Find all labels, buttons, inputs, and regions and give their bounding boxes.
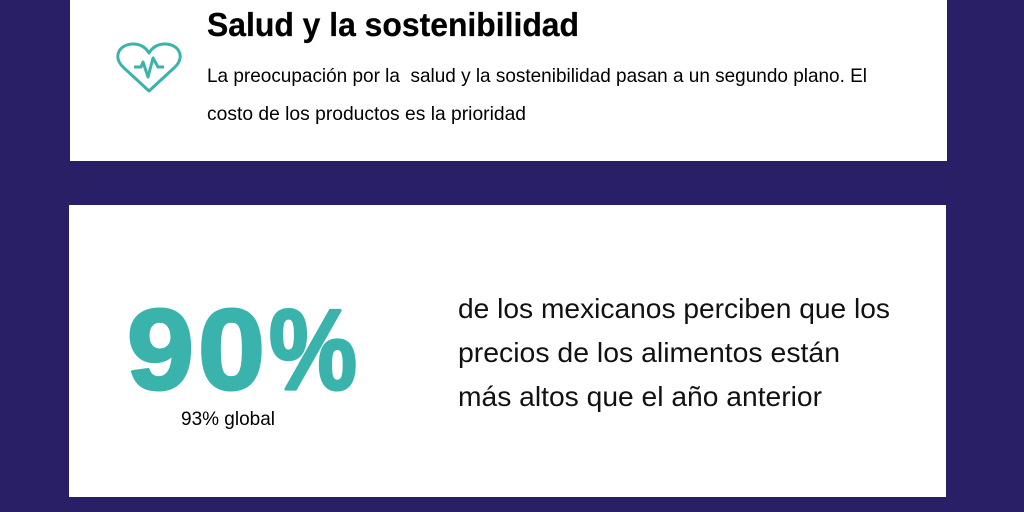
text block: statistic description: precios de los alimentos están [458, 337, 840, 368]
big number: 9 [127, 287, 194, 414]
text block: statistic description: más altos que el año anterior [458, 381, 822, 412]
global comparison: 93% global [181, 408, 275, 430]
text block: description: costo de los productos es la prioridad [207, 103, 526, 125]
panel: salud y sostenibilidad [70, 0, 947, 161]
text block: statistic description [458, 293, 890, 412]
text block: statistic description: de los mexicanos perciben que los [458, 293, 890, 324]
panel: estadística de precios [69, 205, 946, 497]
text block: description: La preocupación por la salud y la sostenibilidad pasan a un segundo plano. El [207, 65, 867, 87]
big number [127, 287, 357, 414]
heading: Salud y la sostenibilidad [207, 6, 579, 43]
big number: 0 [198, 287, 265, 414]
text block: description [207, 65, 867, 125]
icon: heart with pulse [118, 44, 180, 91]
big number: % [269, 287, 357, 414]
